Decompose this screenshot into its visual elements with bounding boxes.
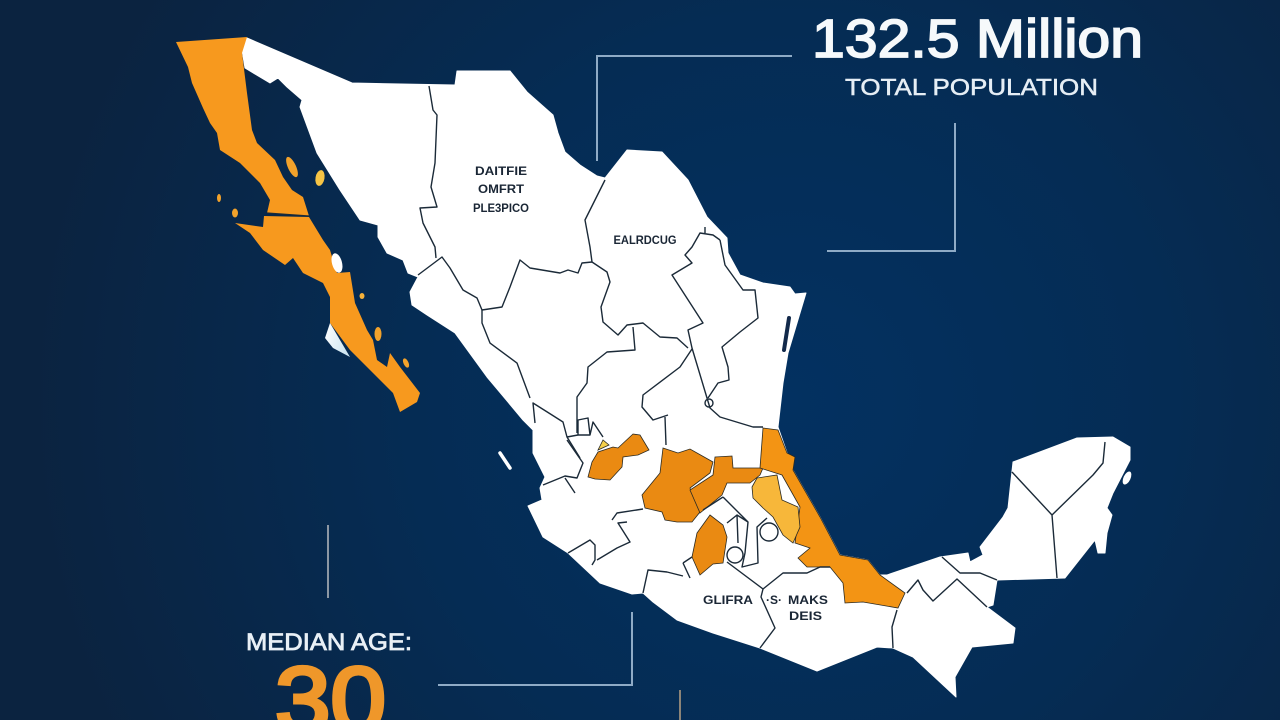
median age label: MEDIAN AGE: (246, 629, 412, 656)
map of Mexico (176, 37, 1133, 697)
population value: 132.5 Million (812, 9, 1143, 69)
Baja divider (267, 213, 309, 216)
Baja California south, orange (235, 216, 420, 412)
map label: north: DAITFIE (475, 166, 527, 178)
map label: north (473, 166, 529, 215)
Baja California north, orange (176, 37, 309, 216)
state borders (418, 86, 1105, 648)
map label: north: OMFRT (478, 184, 524, 196)
map label: north: PLE3PICO (473, 203, 529, 215)
map label: south: DEIS (789, 611, 822, 623)
population label: TOTAL POPULATION (845, 74, 1098, 100)
map label: northeast: EALRDCUG (614, 235, 677, 247)
central orange states (588, 428, 905, 608)
callout lines (328, 56, 955, 720)
median age stat (246, 629, 412, 720)
mainland silhouette (242, 38, 1130, 697)
map label: south: ·S· (766, 595, 782, 607)
map label: south (703, 595, 828, 623)
map label: south: GLIFRA (703, 595, 753, 607)
Baja cape highlight (325, 323, 350, 357)
population stat (812, 9, 1143, 100)
gulf islands (217, 155, 1133, 486)
map label: south: MAKS (788, 595, 828, 607)
